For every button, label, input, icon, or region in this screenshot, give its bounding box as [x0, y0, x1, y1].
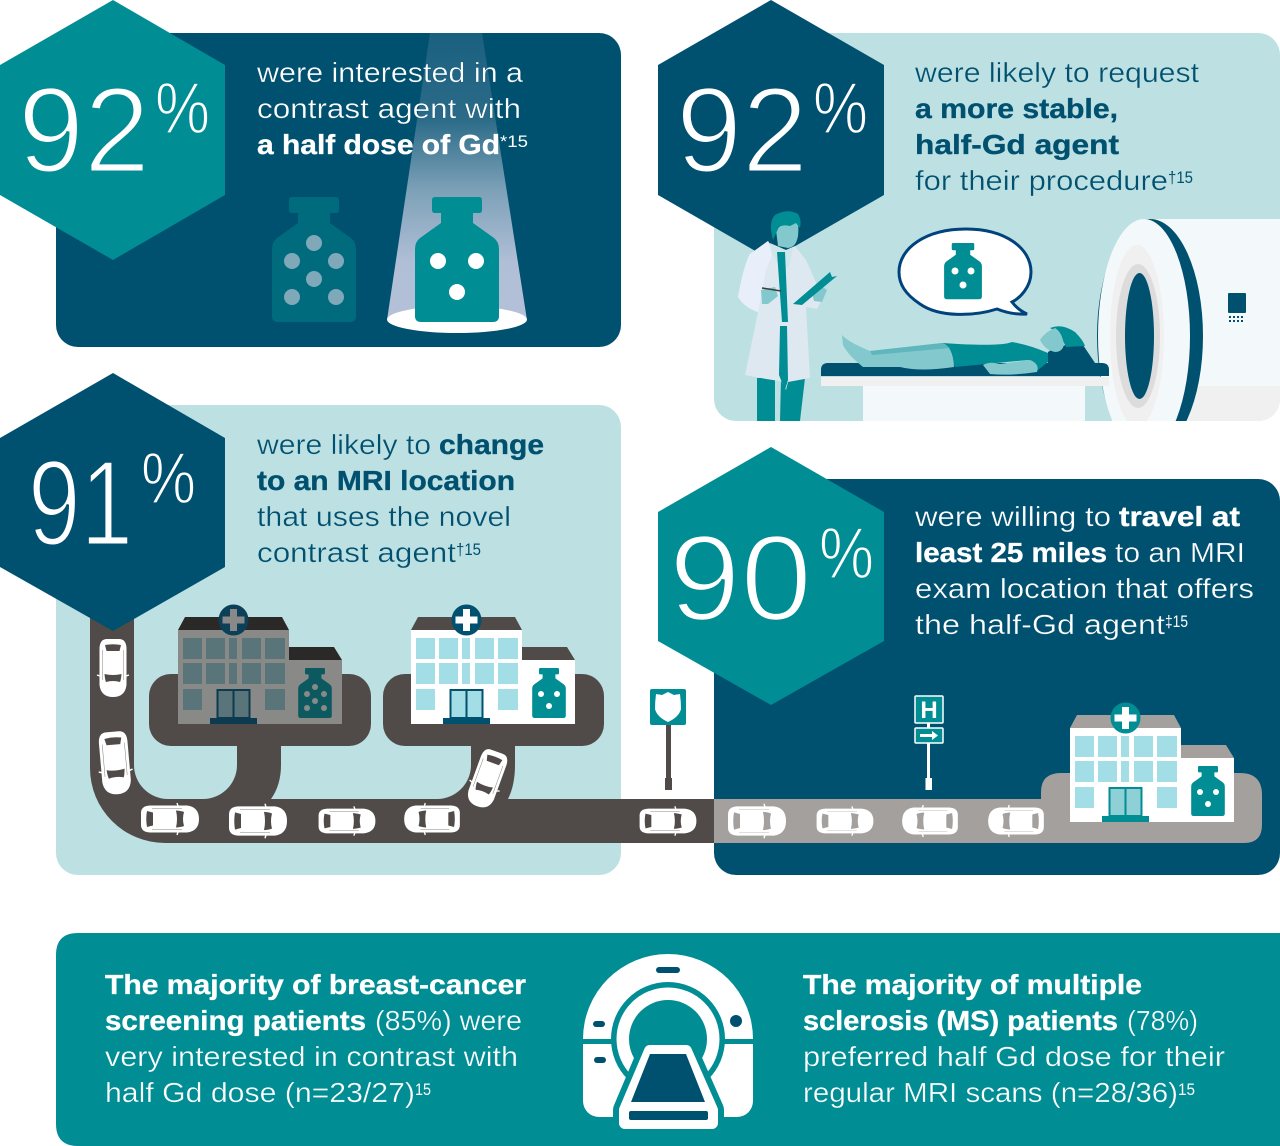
panel: likely to change location [56, 405, 621, 875]
panel: likely to request [714, 33, 1280, 453]
cars on grey road [728, 804, 1044, 838]
text: MS patients: 15 [1178, 1080, 1195, 1099]
road: dark route to two hospitals [90, 610, 714, 843]
text: change location: that uses the novel [257, 501, 511, 532]
text: willing to travel: ‡15 [1165, 612, 1188, 631]
text: MS patients: regular MRI scans (n=28/36) [803, 1077, 1178, 1108]
text: likely to request: a more stable, [915, 93, 1118, 124]
text: change location: were likely to [256, 429, 431, 460]
text: breast-cancer patients: 15 [415, 1080, 431, 1099]
text: willing to travel [914, 501, 1254, 640]
text: MS patients: (78%) [1127, 1005, 1198, 1036]
text: half dose interest: contrast agent with [257, 93, 521, 124]
text: change location: change [439, 429, 544, 460]
text: breast-cancer patients: (85%) were [375, 1005, 522, 1036]
text: change location: contrast agent [257, 537, 456, 568]
spotlight pool [387, 306, 527, 333]
text: MS patients: sclerosis (MS) patients [803, 1005, 1118, 1036]
text: likely to request: for their procedure [915, 165, 1168, 196]
text: likely to request: half-Gd agent [915, 129, 1119, 160]
text: likely to request: †15 [1168, 168, 1193, 187]
hexagon stat: 92% half dose [0, 0, 225, 260]
icon: highlighted vial with three dots [415, 197, 499, 322]
hexagon stat: 92% half dose: 92 [18, 62, 150, 198]
text: willing to travel: exam location that offers [915, 573, 1254, 604]
text: breast-cancer patients: half Gd dose (n=23/27) [105, 1077, 415, 1108]
patient lying on table [842, 326, 1095, 375]
speech bubble with vial [899, 229, 1031, 314]
spotlight beam [387, 33, 527, 320]
hexagon stat: 92% request: % [813, 69, 868, 149]
text: likely to request: were likely to request [914, 57, 1199, 88]
doctor with clipboard [738, 211, 837, 421]
text: change location [256, 429, 544, 568]
road sign: highway shield [650, 689, 686, 790]
panel: half dose interest [56, 33, 621, 347]
text: willing to travel: least 25 miles [915, 537, 1107, 568]
icon: dimmed vial with six dots [272, 197, 356, 322]
hexagon stat: 91% change: 91 [28, 435, 133, 571]
MRI scanner [1097, 219, 1280, 421]
text: half dose interest: *15 [500, 132, 528, 151]
icon: MRI scanner [583, 954, 753, 1123]
text: willing to travel: travel at [1119, 501, 1240, 532]
hexagon stat: 91% change [0, 373, 225, 631]
text: half dose interest: a half dose of Gd [257, 129, 500, 160]
text: likely to request [914, 57, 1199, 196]
panel: willing to travel [714, 479, 1280, 875]
text: MS patients: preferred half Gd dose for their [803, 1041, 1225, 1072]
hexagon stat: 91% change: % [141, 439, 196, 519]
text: half dose interest [256, 57, 528, 160]
cars on dark road [95, 639, 696, 838]
text: MS patients: The majority of multiple [803, 969, 1142, 1000]
building: destination hospital [1070, 702, 1234, 822]
road: grey route to hospital [714, 773, 1262, 843]
hexagon stat: 90% travel: % [819, 514, 874, 594]
text: breast-cancer patients: very interested in contrast with [105, 1041, 518, 1072]
building: hospital with three-dot vial [411, 604, 575, 724]
hexagon stat: 90% travel [658, 447, 884, 705]
text: change location: to an MRI location [257, 465, 515, 496]
text: breast-cancer patients [105, 969, 526, 1108]
text: change location: †15 [456, 540, 481, 559]
hexagon stat: 92% request: 92 [676, 62, 808, 198]
panel: patient preference summary [56, 933, 1280, 1146]
text: willing to travel: were willing to [914, 501, 1111, 532]
text: breast-cancer patients: The majority of breast-cancer [105, 969, 526, 1000]
text: willing to travel: to an MRI [1115, 537, 1245, 568]
building: old hospital with six-dot vial [178, 604, 342, 724]
text: MS patients [803, 969, 1225, 1108]
road sign: hospital direction [915, 696, 943, 790]
hexagon stat: 92% request [658, 0, 884, 260]
text: breast-cancer patients: screening patients [105, 1005, 366, 1036]
hexagon stat: 92% half dose: % [155, 69, 210, 149]
hexagon stat: 90% travel: 90 [669, 510, 812, 646]
text: willing to travel: the half-Gd agent [915, 609, 1165, 640]
text: half dose interest: were interested in a [256, 57, 523, 88]
road sign: hospital direction: H [920, 697, 938, 724]
MRI table [821, 363, 1109, 421]
